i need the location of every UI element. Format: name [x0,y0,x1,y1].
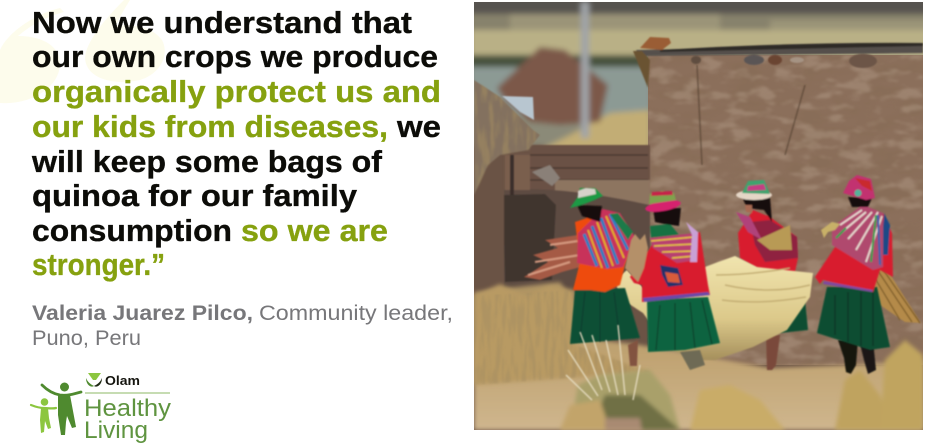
quote text: Now we understand that [32,5,412,40]
adobe wall [648,55,923,365]
quote text: so we are [241,213,388,248]
roof and stones [633,37,923,88]
quote text: our kids from diseases, [32,109,388,144]
woman 1 [524,188,640,366]
icon: Olam leaf [86,373,102,387]
attribution [32,302,453,350]
quote text: quinoa for our family [32,178,358,213]
quote text: our own crops we produce [32,39,438,74]
Healthy Living wordmark: Living [84,417,148,444]
blurred background landscape [470,0,930,150]
logo: Olam Healthy Living [31,373,171,444]
dry grass ground [474,282,923,430]
grain sack [615,256,813,360]
attribution: Puno, Peru [32,327,141,350]
attribution: Community leader, [259,302,453,325]
woman 2 [625,191,720,370]
thatched hut and stone walls [474,80,650,300]
woman 4 [815,175,893,350]
attribution: Valeria Juarez Pilco, [32,302,253,325]
woman 4 legs and straw bundle [838,265,921,374]
Healthy Living wordmark [84,395,171,444]
quote text: organically protect us and [32,74,441,109]
quote text [31,5,441,282]
icon: child figure [31,398,56,433]
quote text: will keep some bags of [31,144,383,179]
Olam wordmark: Olam [105,374,140,388]
photo: women carrying quinoa [470,0,930,430]
Healthy Living wordmark: Healthy [84,395,171,422]
quote text: consumption [32,213,232,248]
woman 3 [736,180,808,370]
background quotation mark watermark [0,0,165,103]
icon: adult figure [42,382,81,435]
foreground grass tufts [560,325,923,430]
quote text: we [396,109,441,144]
quote text: stronger.” [32,247,165,282]
